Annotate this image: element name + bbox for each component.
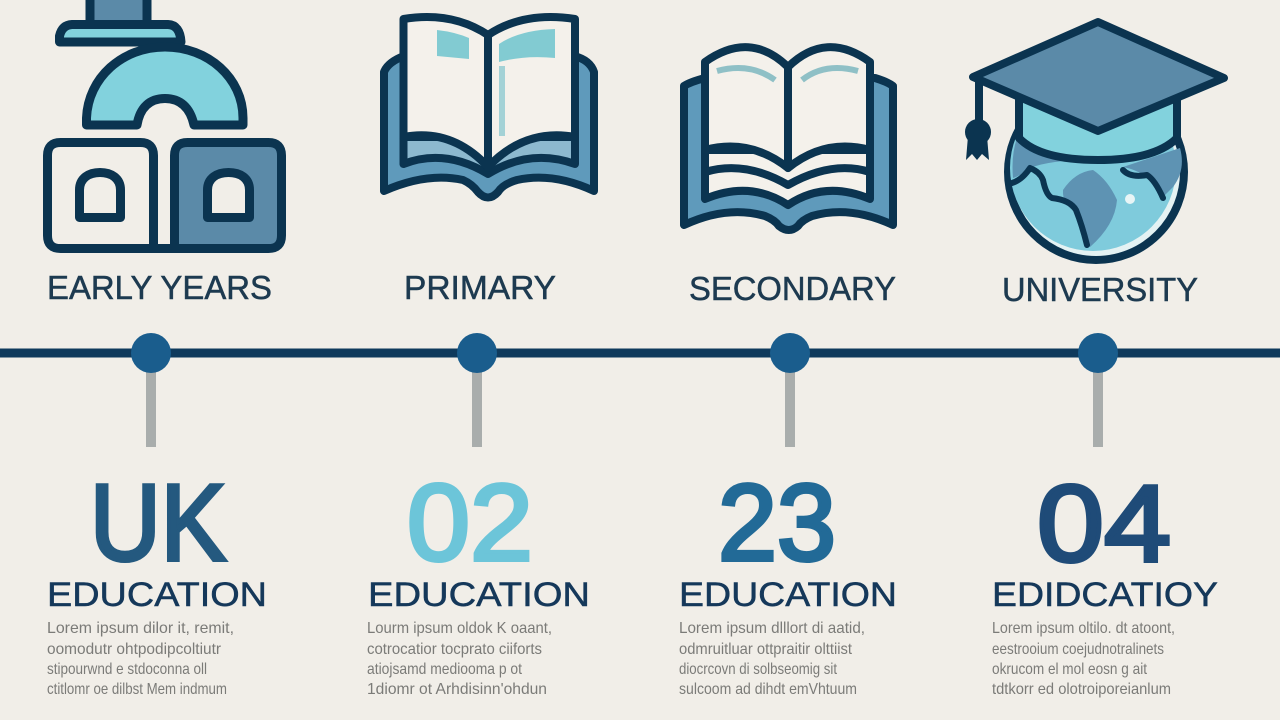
body text column 4	[992, 620, 1175, 698]
body text column 3: Lorem ipsum dlllort di aatid,	[679, 620, 865, 637]
connector stems	[146, 368, 1103, 447]
timeline nodes	[131, 333, 1118, 373]
column heading 1: EDUCATION	[47, 576, 267, 614]
icon: open book primary	[384, 17, 594, 198]
body text column 3: odmruitluar ottpraitir olttiist	[679, 641, 853, 658]
timeline axis with nodes	[0, 333, 1280, 447]
body text column 2	[367, 620, 552, 698]
body text column 3	[679, 620, 865, 698]
body text column 4: Lorem ipsum oltilo. dt atoont,	[992, 620, 1175, 637]
big number: 02: 02	[407, 462, 533, 584]
stage label: secondary: SECONDARY	[689, 270, 896, 307]
body text column 2: 1diomr ot Arhdisinn'ohdun	[367, 681, 547, 698]
book highlight marks	[717, 68, 858, 80]
icon: open book secondary	[684, 47, 893, 230]
column heading 2: EDUCATION	[368, 576, 590, 614]
body text column 1	[47, 620, 234, 698]
stage label: early years: EARLY YEARS	[47, 269, 272, 306]
column heading 4: EDIDCATIOY	[992, 576, 1218, 614]
stage label: university: UNIVERSITY	[1002, 271, 1198, 308]
body text column 4: eestrooium coejudnotralinets	[992, 641, 1164, 658]
icon: graduation cap on globe	[966, 22, 1224, 260]
globe continents	[1010, 85, 1182, 251]
big heading: UK: UK	[90, 462, 226, 584]
body text column 1: Lorem ipsum dilor it, remit,	[47, 620, 234, 637]
big number: 23: 23	[718, 462, 836, 584]
book highlight marks	[437, 29, 555, 136]
body text column 3: sulcoom ad dihdt emVhtuum	[679, 681, 857, 698]
body text column 1: stipourwnd e stdoconna oll	[47, 661, 207, 678]
stage label: primary: PRIMARY	[404, 269, 556, 306]
body text column 2: cotrocatior tocprato ciiforts	[367, 641, 542, 658]
body text column 3: diocrcovn di solbseomig sit	[679, 661, 837, 678]
tassel	[966, 80, 989, 160]
body text column 2: atiojsamd mediooma p ot	[367, 661, 522, 678]
big number: 04: 04	[1037, 463, 1171, 585]
body text column 1: ctitlomr oe dilbst Mem indmum	[47, 681, 227, 698]
body text column 2: Lourm ipsum oldok K oaant,	[367, 620, 552, 637]
icon: early years toy blocks	[48, 0, 282, 248]
body text column 1: oomodutr ohtpodipcoltiutr	[47, 641, 222, 658]
body text column 4: okrucom el mol eosn g ait	[992, 661, 1147, 678]
body text column 4: tdtkorr ed olotroiporeianlum	[992, 681, 1171, 698]
column heading 3: EDUCATION	[679, 576, 897, 614]
